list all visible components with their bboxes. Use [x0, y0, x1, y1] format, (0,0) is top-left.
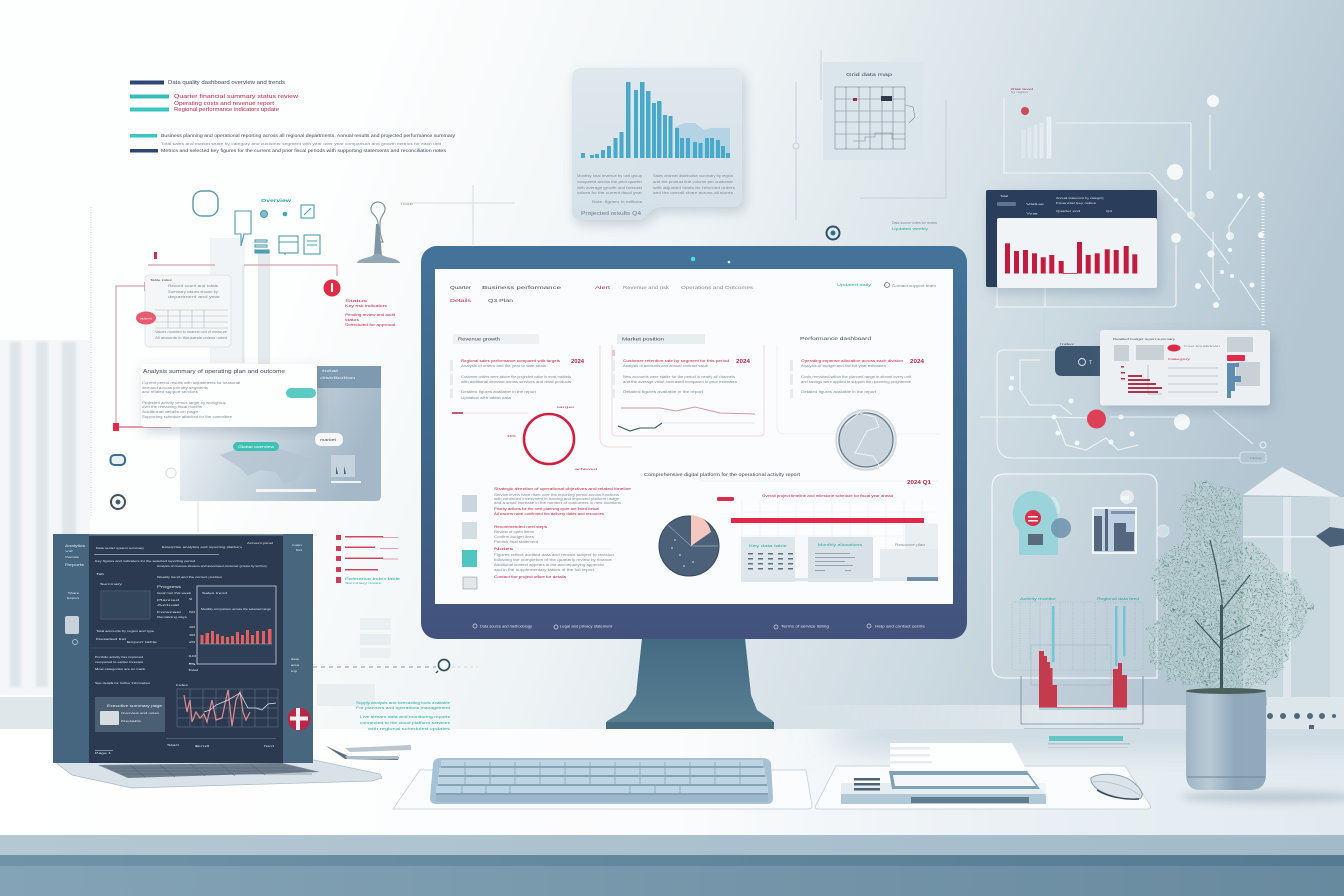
panel: white text card	[141, 364, 317, 427]
top left text block: Business planning and operational reporting across all regional departments. Annual results and projected performance summary	[161, 133, 456, 138]
white map label	[315, 433, 343, 446]
text: findings list: and in the supplementary tables of the full report	[494, 568, 594, 572]
panel: white text card: demand across primary segments	[142, 386, 208, 390]
markers	[113, 252, 157, 431]
laptop small panel: Detailed list	[96, 637, 126, 641]
red node lower	[1087, 410, 1106, 428]
chart: red ring: 36%	[507, 434, 516, 438]
card text: compared across the prior quarter	[577, 180, 643, 184]
panel: KPI three: Performance dashboard	[800, 336, 872, 341]
red list by laptop: Summary notes	[345, 581, 382, 585]
panel: KPI three: Detailed figures available in the report	[801, 390, 876, 394]
text: findings list: All owners have confirmed the delivery dates and resources	[494, 512, 605, 516]
laptop small panel: Actual	[157, 603, 180, 607]
laptop base	[55, 760, 382, 788]
card text: and the overall share across all stores	[653, 191, 733, 195]
laptop notes	[95, 655, 150, 685]
bar chart: teal histogram	[581, 82, 730, 158]
red callout text: status	[345, 317, 359, 322]
laptop side nav text: Analytics	[65, 543, 85, 548]
teal notes: with regional scheduled updates	[368, 727, 450, 731]
laptop side nav text: Share	[68, 591, 79, 595]
red node: by region	[1011, 91, 1029, 94]
panel: KPI one: Updated with latest data	[461, 396, 511, 400]
skyline mini chart	[1092, 507, 1137, 554]
panel: report card: Detailed budget report summary	[1113, 337, 1176, 341]
text: findings list	[494, 486, 631, 579]
laptop header text: Enterprise analytics and reporting platform	[162, 545, 243, 549]
faint connector lines	[166, 185, 515, 532]
panel: lower right outline	[992, 474, 1169, 748]
panel: red bar card: Financial key ratios	[1056, 201, 1097, 205]
text: findings list: Publish final statement	[494, 540, 538, 544]
icon: rounded square	[193, 191, 218, 216]
panel: KPI two with line chart: Analysis of accounts and annual contract value	[623, 364, 708, 368]
label: Overview	[261, 198, 292, 203]
text: findings list: Recommended next steps	[494, 525, 547, 529]
panel: KPI one: Detailed figures available in the report	[461, 390, 536, 394]
laptop side nav text: area	[291, 663, 299, 667]
red node	[1011, 87, 1034, 115]
note text: Updated weekly	[892, 226, 928, 231]
laptop notes: compared to earlier forecast	[95, 660, 143, 664]
faint blocks under list	[360, 618, 391, 658]
panel: table card	[145, 275, 231, 347]
dashboard header: Contact support team	[892, 283, 936, 288]
top left text block: Operating costs and revenue report	[174, 101, 275, 107]
red pill	[136, 312, 156, 324]
panel: blue map panel: distribution	[320, 375, 355, 380]
laptop candlestick chart	[176, 683, 278, 727]
red list by laptop	[336, 535, 400, 585]
red list by laptop: Reference index table	[345, 577, 400, 581]
laptop notes: Portfolio activity has improved	[95, 655, 143, 659]
red callout text: Status	[345, 298, 367, 303]
laptop side nav text: list	[296, 548, 302, 552]
bezel footer text: Data source and methodology	[480, 624, 532, 628]
text: findings list: Figures reflect audited data and remain subject to revision	[494, 553, 614, 557]
laptop red bar chart	[197, 586, 276, 664]
red callout dot	[324, 280, 340, 296]
pie chart	[659, 515, 719, 576]
desk mats	[393, 766, 1151, 809]
laptop small panel: Forecast	[157, 610, 181, 614]
panel: white text card: Additional details on page	[142, 410, 198, 414]
red callout text: Key risk indicators	[345, 303, 387, 308]
mouse	[1091, 774, 1142, 799]
laptop header text: Key figures and indicators for the selected reporting period	[95, 559, 195, 563]
dark pill tab: T	[1089, 360, 1092, 366]
card text: with adjusted totals for returned orders	[653, 186, 735, 190]
teal notes	[356, 701, 450, 731]
top left text block: Data quality dashboard overview and trends	[168, 80, 286, 86]
teal map label	[233, 442, 279, 451]
panel: blue map panel	[180, 366, 381, 501]
white map label: market	[320, 438, 336, 442]
chart: red ring: target	[557, 405, 574, 409]
red callout text: Pending review and audit	[345, 312, 396, 317]
laptop header text: Account panel	[247, 541, 273, 545]
text: findings list: Confirm budget lines	[494, 535, 535, 539]
icon: round smile	[111, 495, 125, 509]
laptop	[53, 534, 382, 788]
panel: KPI one: Revenue growth	[458, 336, 501, 342]
laptop candlestick chart: Index	[176, 683, 189, 687]
bezel footer text: Help and contact centre	[875, 624, 925, 628]
panel: KPI one: with additional demand across services and retail products	[461, 380, 571, 384]
pale columns	[210, 238, 270, 365]
laptop small panel: Planned	[157, 598, 180, 602]
network lines	[980, 98, 1260, 458]
icon: chat badge	[110, 455, 125, 465]
laptop small panel: Remaining days	[157, 615, 188, 619]
card text: values for the current fiscal year	[577, 191, 643, 195]
timeline grid chart: Resource plan	[895, 543, 925, 547]
laptop side nav text: top	[291, 669, 297, 673]
laptop small panel: Goal met this week	[157, 591, 192, 595]
left connected interface cluster	[91, 185, 515, 532]
laptop red bar chart: Sales trend	[202, 591, 228, 595]
chart: red ring	[452, 405, 598, 471]
icon: desk lamp bulb	[357, 201, 413, 263]
panel: KPI one: 2024	[571, 359, 585, 365]
laptop side nav text: Overview	[65, 555, 80, 559]
teal shield blob	[1013, 491, 1071, 555]
dashboard header: Operations and Outcomes	[681, 285, 754, 290]
timeline grid chart: Overall project timeline and milestone schedule for fiscal year ahead	[762, 494, 893, 498]
bar chart: red bars	[1005, 242, 1137, 274]
laptop notes: Most categories are on track	[95, 667, 146, 671]
icon: glass lens globe	[836, 410, 896, 470]
panel: KPI one: Regional sales performance compared with targets	[461, 358, 560, 363]
laptop axis labels: Total	[188, 668, 199, 672]
text: findings list: following the completion of the quarterly review by finance	[494, 558, 612, 562]
monitor	[421, 246, 967, 729]
icons: teal glyph row	[235, 205, 320, 255]
panel: white text card: over the remaining fiscal months	[142, 405, 202, 409]
laptop axis labels: 30	[189, 633, 196, 637]
teal pill button	[286, 388, 316, 398]
laptop header text	[94, 541, 273, 579]
red pill: alert	[140, 316, 152, 320]
laptop axis labels: 40	[189, 625, 196, 629]
plant pot	[1186, 688, 1266, 790]
card text	[577, 174, 735, 217]
laptop thumbnail card	[95, 697, 165, 732]
panel: report card	[1100, 330, 1270, 406]
dark pill tab	[1055, 342, 1101, 376]
panel: KPI two with line chart: Detailed figures available in the report	[623, 390, 703, 394]
keyboard	[430, 758, 773, 804]
panel: table card: All amounts in thousands unless noted	[155, 336, 227, 340]
text: findings list: Service levels have risen over the reporting period across functions	[494, 493, 620, 497]
monitor screen	[435, 269, 953, 604]
teal notes: connected to the cloud platform services	[360, 721, 450, 725]
teal notes: Live stream data and monitoring reports	[360, 715, 450, 719]
laptop footer	[95, 738, 276, 755]
panel: top chart card	[572, 68, 742, 220]
monitor stand	[606, 638, 774, 729]
panel: white text card: Current period results with adjustments for seasonal	[142, 381, 240, 385]
panel: table card: Table index	[150, 278, 173, 282]
panel: table card: Record count and totals	[168, 284, 219, 288]
dashboard header: Details	[450, 298, 472, 303]
bezel footer text	[473, 624, 925, 629]
laptop small panel: Total accounts by region and type	[96, 629, 154, 633]
card text: Note: figures in millions	[592, 200, 642, 204]
top left text block: Metrics and selected key figures for the current and prior fiscal periods with supporting statements and reconciliation notes	[161, 148, 447, 153]
panel: red bar card	[986, 190, 1157, 288]
panel: report card: Category	[1168, 357, 1191, 361]
teal bars under chart	[1048, 736, 1130, 748]
dashboard header	[450, 282, 936, 303]
note text	[892, 221, 937, 231]
red callout text: Scheduled for approval	[345, 322, 395, 327]
tablet on desk	[326, 745, 411, 760]
panel: red bar card: Q4	[1106, 209, 1112, 213]
laptop small panel: Summary	[100, 582, 123, 586]
document stack	[841, 743, 1046, 804]
section heading: 2024 Q1	[907, 480, 931, 486]
laptop side nav text: v2	[65, 549, 74, 553]
panel: KPI two with line chart: 2024	[736, 359, 751, 365]
laptop side nav text: Reports	[65, 562, 84, 567]
panel: white text card: Analysis summary of operating plan and outcome	[143, 369, 285, 375]
laptop footer: Next	[264, 744, 274, 748]
laptop axis labels: 5	[188, 662, 198, 666]
dense chart: Regional data feed	[1097, 597, 1139, 601]
panel: KPI two with line chart: Customer retention rate by segment for this period	[623, 358, 729, 363]
laptop notes: See details for further information	[95, 681, 150, 685]
timeline grid chart: Key data table	[749, 544, 787, 548]
panel: small grid chart	[823, 62, 923, 160]
plant	[1147, 482, 1310, 790]
panel: KPI two with line chart: and the average value increased compared to prior estimates	[623, 380, 737, 384]
laptop header text: Analysis of revenue streams and associated customer groups by territory	[157, 564, 268, 568]
laptop side nav text: Export	[67, 596, 79, 600]
panel: KPI three	[777, 336, 940, 434]
panel: report card: Cost breakdown	[1184, 344, 1221, 348]
laptop axis labels: 60	[189, 610, 196, 614]
laptop axis labels: 20	[189, 640, 196, 644]
dotted frame line	[90, 207, 92, 516]
panel: KPI three: Analysis of budget and the full year estimates	[801, 364, 886, 368]
laptop footer: Page 1	[95, 751, 112, 755]
section heading: Comprehensive digital platform for the operational activity report	[644, 472, 801, 477]
teal notes: For planners and operations management	[356, 706, 450, 710]
laptop header text: Weekly trend and the current position	[157, 575, 222, 579]
dense chart	[1012, 597, 1143, 729]
panel: table card: Summary values shown by	[168, 290, 219, 294]
laptop axis labels: 10	[188, 654, 197, 658]
corner note icon: Note	[1250, 456, 1263, 460]
top left text block: Quarter financial summary status review	[174, 94, 299, 100]
desk	[0, 715, 1344, 896]
panel: KPI one	[450, 334, 585, 400]
teal notes: Supply analysis and forecasting tools available	[356, 701, 450, 705]
laptop footer: End	[195, 744, 210, 748]
chart: red ring: achieved	[575, 467, 598, 471]
card text: and the product line volume per customer	[653, 180, 734, 184]
dashboard header: Q3 Plan	[488, 298, 514, 303]
panel: KPI one: Analysis of orders and the year to date totals	[461, 364, 546, 368]
panel: red bar card: Annual statement by category	[1056, 196, 1105, 200]
text: findings list: Priority actions for the next planning cycle are listed below	[494, 507, 600, 511]
panel: red bar card: Total	[1000, 194, 1008, 198]
laptop axis labels	[188, 597, 199, 672]
card text: with average growth and forecast	[577, 186, 642, 190]
red connectors	[116, 265, 337, 427]
icon: desk lamp bulb: note	[401, 201, 413, 206]
dashboard header: Updated daily	[837, 282, 871, 287]
dashboard header: Quarter	[450, 285, 472, 290]
laptop small panel: Progress	[157, 585, 182, 589]
panel: table card: Values rounded to nearest unit of measure	[155, 330, 227, 334]
text: findings list: with continued investment in training and improved platform usage	[494, 497, 619, 501]
dashed connector and icon	[313, 660, 478, 673]
bar sparkline top	[1022, 117, 1051, 158]
corner note icon	[1240, 442, 1266, 463]
note text: Data source notes for review	[892, 221, 937, 225]
section heading	[644, 472, 938, 486]
top left text block: Total sales and market share by category and customer segment with year over year comparison and growth metrics for each unit	[161, 141, 442, 146]
card text: Projected results Q4	[581, 211, 641, 217]
panel: white text card: Supporting schedule attached for the committee	[142, 415, 232, 419]
laptop small panel: Export table	[127, 640, 158, 644]
text: findings list: Additional context appears in the accompanying appendix	[494, 563, 605, 567]
top left text block	[130, 80, 456, 153]
panel: small grid chart: Grid data map	[846, 72, 893, 77]
panel: red bar card: Quarter end	[1056, 209, 1080, 213]
plant canopy	[1147, 482, 1310, 692]
laptop thumbnail card: Overview and notes	[121, 711, 160, 715]
laptop red bar chart: Monthly comparison across the selected range	[201, 607, 271, 611]
timeline grid chart	[717, 494, 938, 582]
timeline grid chart: Monthly allocations	[818, 543, 862, 547]
dark pill tab: Index	[1060, 342, 1075, 346]
dashboard header: Revenue and risk	[623, 285, 670, 290]
laptop header text: Tab	[96, 572, 105, 576]
text: findings list: and a small increase in the number of customers in new locations	[494, 501, 622, 505]
panel: KPI three: and savings were applied to support the upcoming programme	[801, 380, 911, 384]
connector lines top centre	[793, 50, 946, 220]
red node: Risk level	[1011, 87, 1034, 91]
dense chart: Activity monitor	[1020, 597, 1057, 601]
bezel footer text: Terms of service listing	[781, 624, 829, 628]
laptop axis labels: 9	[189, 597, 193, 601]
icon: target marker	[826, 226, 840, 240]
laptop side nav text	[65, 543, 302, 673]
panel: KPI two with line chart: Market position	[622, 336, 665, 342]
card text: Monthly total revenue by unit group	[577, 174, 642, 178]
panel: KPI three: 2024	[910, 359, 925, 365]
panel: KPI two with line chart	[600, 334, 764, 447]
dashboard header: Business performance	[482, 285, 562, 290]
top left text block: Regional performance indicators update	[174, 107, 279, 113]
panel: KPI three: Costs remained within the planned range in almost every unit	[801, 375, 911, 379]
panel: blue map panel: total	[322, 368, 338, 373]
panel: white text card: Projected activity versus target by workgroup	[142, 401, 226, 405]
text: findings list: Notes	[494, 547, 514, 551]
network nodes	[1008, 95, 1264, 446]
dashboard header: Alert	[595, 285, 611, 290]
red callout text	[345, 298, 396, 327]
bezel footer text: Legal and privacy statement	[560, 624, 612, 628]
icon: red plus button	[288, 708, 310, 730]
teal map label: Global overview	[238, 445, 275, 449]
laptop side nav text: main	[292, 543, 302, 547]
laptop thumbnail card: Executive summary page	[107, 704, 162, 708]
panel: KPI two with line chart: New accounts were stable for the period in nearly all channels	[623, 375, 735, 379]
building backdrop	[1243, 467, 1344, 767]
monitor frame	[421, 246, 967, 639]
text: findings list: Review of open items	[494, 530, 535, 534]
text: findings list: Strategic direction of operational objectives and related timeline	[494, 486, 631, 491]
panel: red bar card: Value	[1026, 202, 1045, 206]
icons: left document column	[462, 495, 477, 589]
lens bubble	[1120, 490, 1134, 504]
laptop header text: Data center system summary	[96, 546, 145, 550]
panel: KPI three: Operating expense allocation across each division	[801, 358, 903, 363]
card text: Sales channel distribution summary by region	[653, 174, 733, 178]
laptop small panel	[90, 582, 192, 648]
right network	[980, 87, 1270, 463]
laptop screen	[53, 534, 313, 763]
panel: red bar card: Year	[1026, 212, 1038, 216]
laptop side nav text: date	[291, 657, 299, 661]
text: findings list: Contact the project office for details	[494, 575, 566, 579]
panel: white text card: and related support services	[142, 390, 198, 394]
panel: KPI one: Customer orders were above the projected value in most markets	[461, 375, 571, 379]
laptop thumbnail card: Details	[121, 719, 142, 723]
laptop footer: Start	[167, 743, 179, 747]
panel: table card: department and year	[168, 295, 222, 299]
